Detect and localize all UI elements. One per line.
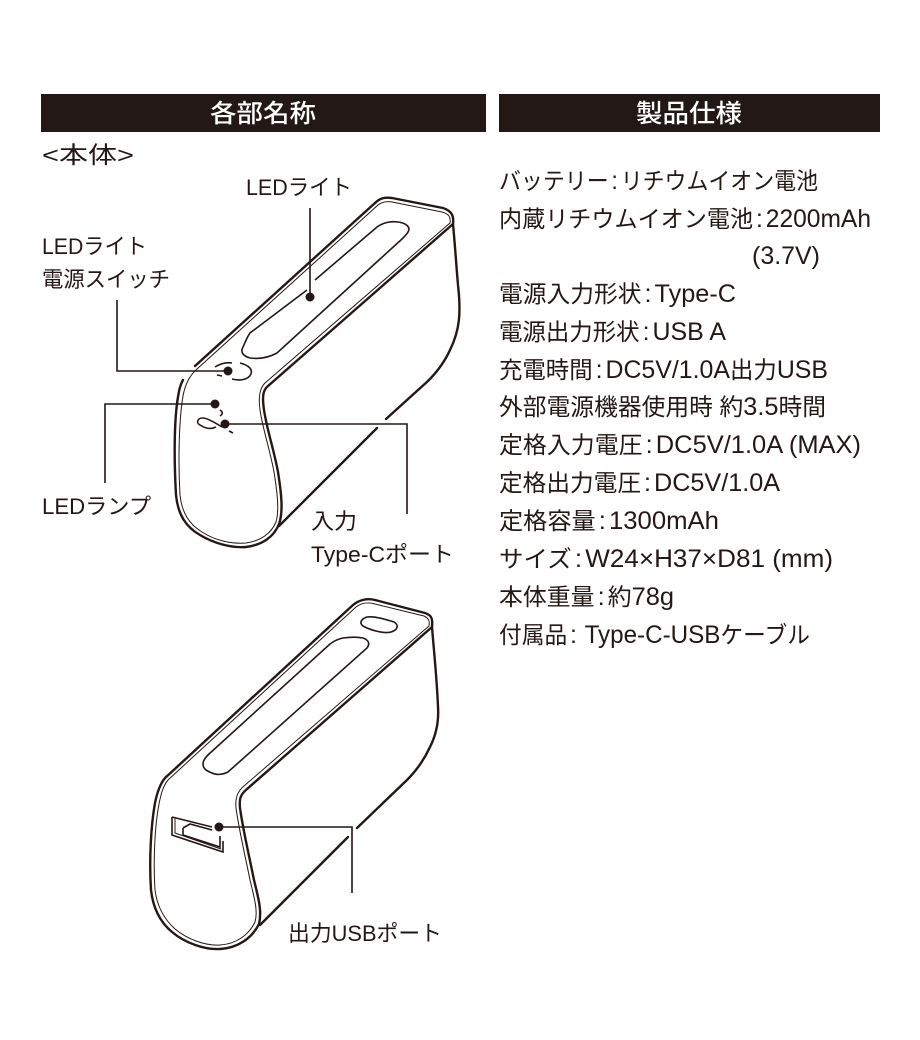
right side silhouette	[260, 627, 438, 925]
specifications list: 電源入力形状:Type-C	[499, 280, 736, 308]
specifications list: 定格入力電圧:DC5V/1.0A (MAX)	[499, 431, 861, 459]
specifications list: 電源出力形状:USB A	[499, 318, 726, 346]
callout: output USB port: 出力USBポート	[288, 921, 442, 946]
specifications list: サイズ:W24×H37×D81 (mm)	[499, 545, 833, 573]
callout: output USB port	[214, 822, 442, 946]
inner contour line	[154, 603, 429, 945]
USB port	[172, 817, 223, 852]
specifications list: 定格出力電圧:DC5V/1.0A	[499, 469, 780, 497]
callout: input Type-C port	[220, 420, 454, 567]
specifications list: バッテリー:リチウムイオン電池	[499, 167, 818, 195]
power switch	[215, 363, 251, 380]
callout: LED lamp	[42, 400, 220, 519]
specifications list	[499, 167, 871, 649]
callout: LED light: LEDライト	[246, 175, 352, 200]
body outline	[150, 599, 432, 949]
LED light slot	[242, 222, 409, 358]
callout: LED light power switch: LEDライト	[42, 234, 147, 259]
callout: input Type-C port: 入力	[311, 509, 357, 534]
illustration: power bank front view	[175, 198, 459, 547]
callout: LED light power switch	[42, 234, 232, 376]
header: parts names: 各部名称	[210, 100, 316, 128]
LED lamp mark	[220, 410, 222, 416]
specifications list: 外部電源機器使用時 約3.5時間	[499, 393, 826, 421]
header: product specifications	[499, 94, 880, 132]
body outline	[175, 198, 453, 547]
specifications list: 定格容量:1300mAh	[499, 507, 719, 535]
header: parts names	[41, 94, 486, 132]
header: product specifications: 製品仕様	[636, 100, 742, 128]
specifications list: 内蔵リチウムイオン電池:2200mAh	[499, 205, 871, 233]
specifications list: (3.7V)	[752, 242, 820, 270]
inner contour line	[179, 202, 450, 543]
oval button	[361, 617, 397, 633]
illustration: power bank rear view	[150, 599, 438, 949]
callout: LED light power switch: 電源スイッチ	[42, 267, 170, 292]
specifications list: 本体重量:約78g	[499, 583, 674, 611]
right side silhouette	[279, 224, 459, 526]
specifications list: 付属品: Type-C-USBケーブル	[499, 621, 810, 649]
specifications list: 充電時間:DC5V/1.0A出力USB	[499, 356, 828, 384]
callout: LED lamp: LEDランプ	[42, 494, 151, 519]
LED light slot	[203, 637, 369, 774]
callout: input Type-C port: Type-Cポート	[311, 542, 454, 567]
callout: LED light	[246, 175, 352, 302]
Type-C port	[198, 418, 233, 433]
subheading: main unit: <本体>	[42, 142, 134, 168]
